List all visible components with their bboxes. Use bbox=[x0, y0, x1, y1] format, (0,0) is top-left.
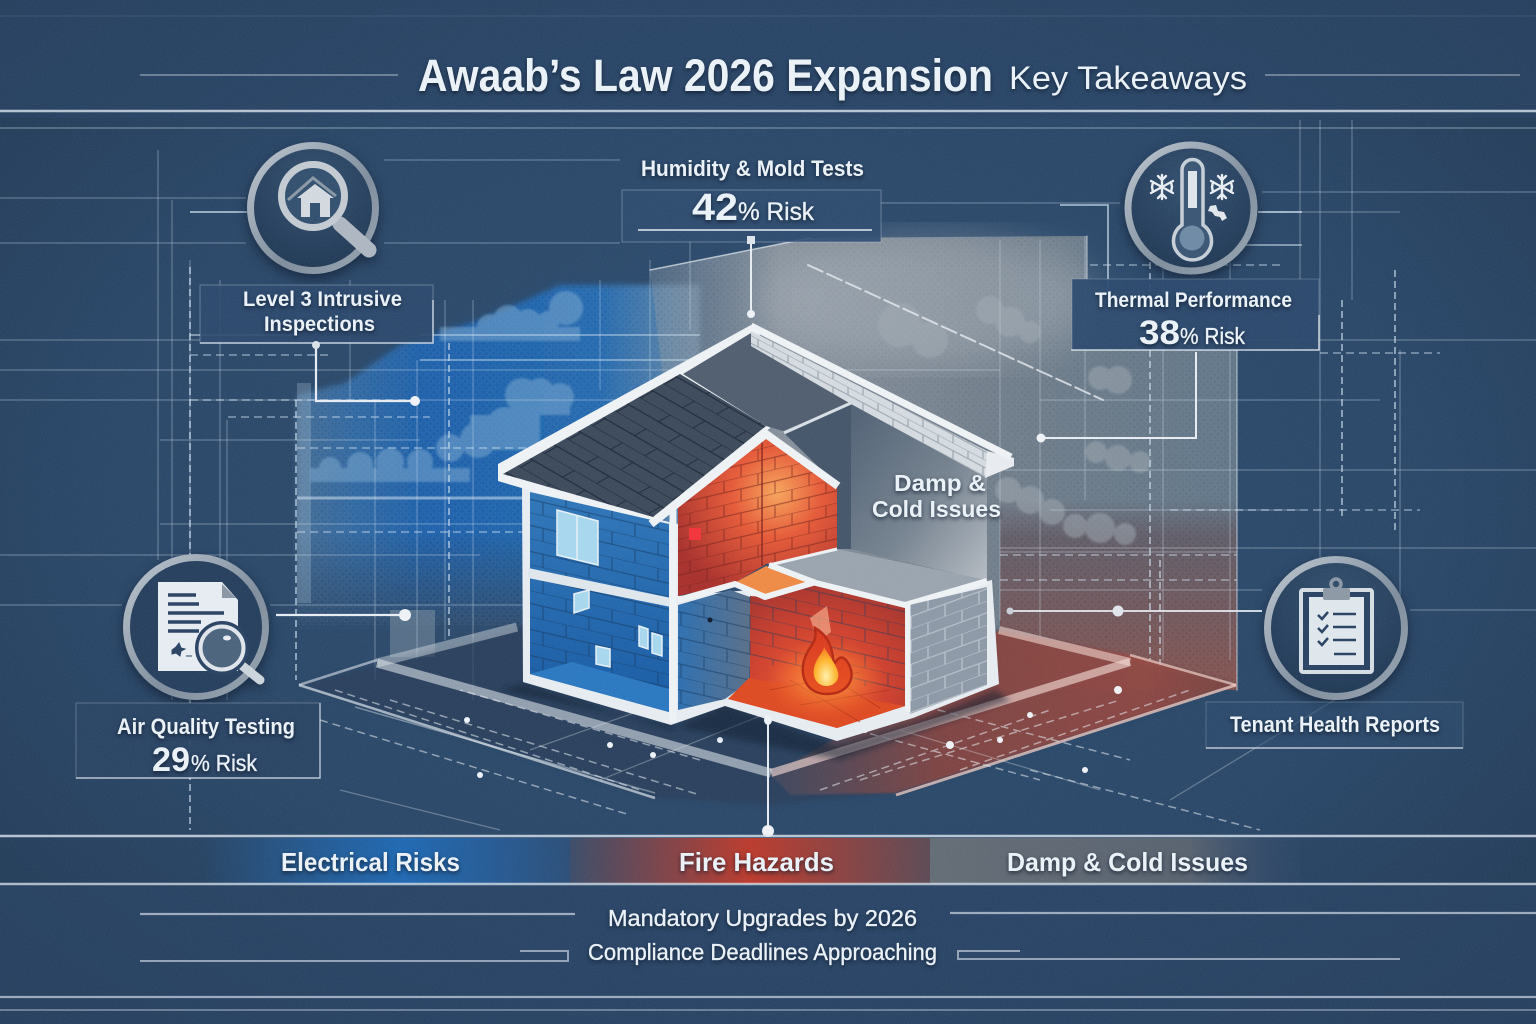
callout: thermal performance: Thermal Performance bbox=[1095, 289, 1292, 312]
footer text: Mandatory Upgrades by 2026 bbox=[608, 905, 917, 931]
roof trim bbox=[985, 451, 1014, 478]
callout: air quality bbox=[76, 703, 320, 779]
house shadow bbox=[500, 684, 1010, 760]
category band bbox=[200, 838, 1300, 884]
windows blue wall bbox=[557, 510, 662, 667]
callout: tenant reports bbox=[1206, 702, 1463, 748]
connector: air quality bbox=[276, 609, 411, 621]
red lower wall bbox=[734, 583, 905, 728]
icon: house magnifier bbox=[250, 146, 376, 270]
grey clouds bbox=[878, 296, 1151, 545]
flame icon bbox=[803, 606, 852, 694]
grey watercolor panel bbox=[650, 235, 1237, 690]
blue wall lower right bbox=[678, 590, 750, 710]
footer text: Compliance Deadlines Approaching bbox=[588, 939, 937, 965]
footer text bbox=[588, 905, 937, 965]
title: Awaab’s Law 2026 Expansion bbox=[418, 50, 993, 101]
inner dark wall bbox=[784, 403, 851, 549]
floor plan bbox=[299, 627, 1400, 830]
blue wall left bbox=[530, 492, 669, 712]
connector: thermal bbox=[1036, 352, 1196, 442]
upper floor opening bbox=[734, 566, 814, 597]
callout: humidity: Humidity & Mold Tests bbox=[641, 156, 864, 181]
callout: tenant reports: Tenant Health Reports bbox=[1230, 712, 1440, 737]
connector: level 3 bbox=[312, 341, 420, 406]
label on wall bbox=[872, 470, 1001, 522]
label on wall: Cold Issues bbox=[872, 496, 1001, 522]
title: Key Takeaways bbox=[1009, 60, 1247, 96]
red upper wall bbox=[678, 437, 837, 596]
footer rules bbox=[0, 836, 1536, 1010]
connector: bottom bbox=[762, 715, 774, 837]
callout: thermal performance: % Risk bbox=[1180, 323, 1245, 349]
connector: humidity bbox=[747, 236, 755, 318]
callout: humidity bbox=[622, 156, 881, 242]
rear gable wall bbox=[683, 333, 851, 431]
callout: thermal performance bbox=[1071, 279, 1319, 352]
blueprint grid bbox=[0, 120, 1536, 830]
band: electrical: Electrical Risks bbox=[281, 847, 460, 877]
blue clouds bbox=[310, 291, 583, 482]
grey brick wall bbox=[909, 587, 987, 714]
callout: level 3 inspections: Level 3 Intrusive bbox=[243, 288, 402, 311]
roof white body bbox=[498, 325, 770, 526]
brick fascia bbox=[751, 331, 987, 478]
band: damp: Damp & Cold Issues bbox=[1007, 847, 1248, 877]
callout: humidity: % Risk bbox=[738, 198, 814, 226]
floor divider bbox=[528, 568, 671, 607]
icon: document magnifier bbox=[126, 558, 266, 696]
blue watercolor panel bbox=[290, 285, 700, 657]
callout: air quality: 29 bbox=[152, 741, 190, 779]
band: fire: Fire Hazards bbox=[679, 847, 834, 877]
callout: air quality: Air Quality Testing bbox=[117, 714, 295, 739]
upper side wall bbox=[851, 403, 987, 581]
flat roof bbox=[769, 549, 987, 603]
callout: thermal performance: 38 bbox=[1139, 314, 1180, 352]
house illustration bbox=[498, 325, 1014, 760]
label on wall: Damp & bbox=[894, 470, 986, 496]
callout: air quality: % Risk bbox=[191, 750, 257, 776]
roof bbox=[503, 374, 766, 517]
band: electrical bbox=[200, 838, 570, 884]
icon: thermometer bbox=[1128, 145, 1254, 271]
callout: level 3 inspections bbox=[200, 285, 433, 343]
band: fire bbox=[570, 838, 930, 884]
house base frame bbox=[522, 488, 999, 741]
band: damp bbox=[930, 838, 1300, 884]
icon: clipboard bbox=[1268, 560, 1404, 696]
callout: level 3 inspections: Inspections bbox=[264, 313, 375, 336]
header rules bbox=[0, 16, 1536, 128]
callout: humidity: 42 bbox=[692, 187, 738, 229]
connector: tenant bbox=[1006, 606, 1262, 616]
